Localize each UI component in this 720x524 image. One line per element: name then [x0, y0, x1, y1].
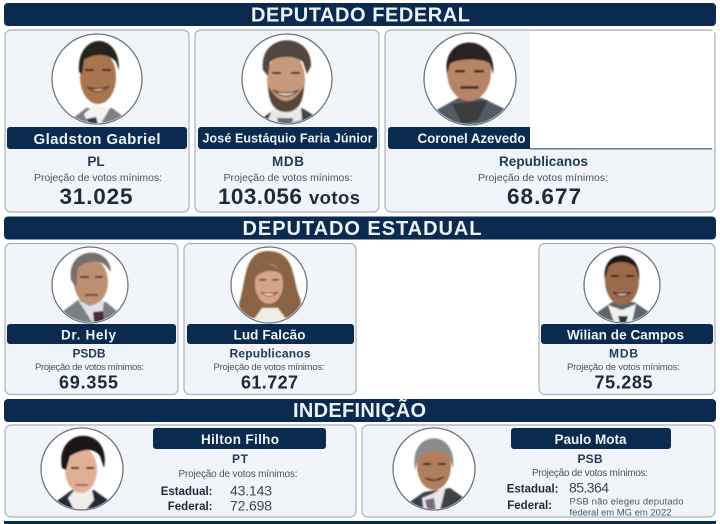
icon: portrait Gladston Gabriel	[52, 34, 142, 130]
icon: portrait Lud Falcão	[231, 247, 307, 323]
label: Projeção de votos mínimos:	[34, 172, 162, 184]
label: Projeção de votos mínimos:	[178, 469, 298, 480]
estadual: Estadual:	[161, 486, 212, 498]
votes: 68.677	[507, 184, 581, 209]
name bar: Wilian de Campos	[567, 328, 684, 342]
votes: 75.285	[594, 372, 652, 392]
panel: Dr. Hely	[5, 244, 178, 394]
federal: federal em MG em 2022	[570, 508, 672, 518]
white cover	[530, 31, 714, 149]
icon: portrait Coronel Azevedo	[424, 33, 516, 130]
party: Republicanos	[499, 154, 588, 169]
name bar: Coronel Azevedo	[418, 131, 526, 146]
party: MDB	[609, 346, 638, 360]
votes: 31.025	[60, 184, 132, 209]
name bar	[388, 127, 714, 149]
federal	[507, 496, 684, 518]
federal: Federal:	[168, 501, 212, 513]
label: Projeção de votos mínimos:	[532, 468, 648, 479]
estadual	[507, 480, 609, 496]
panel: Lud Falcão	[184, 244, 356, 394]
name bar	[511, 428, 671, 449]
icon: portrait José Eustáquio	[242, 34, 332, 130]
icon: portrait Paulo Mota	[393, 428, 475, 512]
party: Republicanos	[230, 346, 311, 360]
estadual	[161, 482, 272, 498]
label: Projeção de votos mínimos:	[567, 362, 680, 373]
icon: portrait Wilian de Campos	[584, 247, 660, 325]
heading: Indefinição	[4, 399, 716, 422]
estadual: Estadual:	[507, 484, 558, 496]
name bar	[187, 324, 354, 344]
panel: Hilton Filho	[5, 425, 356, 517]
icon: portrait Hilton Filho	[41, 428, 123, 512]
label: Projeção de votos mínimos:	[224, 172, 352, 184]
federal: 72.698	[230, 498, 272, 514]
panel: Wilian de Campos	[539, 244, 715, 394]
name bar: Gladston Gabriel	[34, 131, 160, 148]
name bar	[7, 324, 176, 344]
federal: PSB não elegeu deputado	[570, 496, 684, 508]
name bar	[198, 127, 377, 149]
party: PSDB	[72, 346, 106, 360]
party: PSB	[578, 452, 603, 466]
panel: Gladston Gabriel	[5, 30, 189, 212]
name bar: Paulo Mota	[554, 432, 627, 447]
label: Projeção de votos mínimos:	[214, 362, 324, 373]
heading: Deputado Federal	[4, 3, 716, 26]
name bar: Dr. Hely	[61, 328, 116, 342]
heading: Deputado Estadual	[4, 216, 716, 240]
name bar: José Eustáquio Faria Júnior	[202, 132, 373, 146]
party: PL	[87, 154, 105, 169]
federal	[168, 498, 272, 514]
name bar	[541, 324, 713, 344]
estadual: 85.364	[569, 480, 609, 496]
votes: 69.355	[59, 372, 118, 392]
heading: Deputado Estadual: DEPUTADO ESTADUAL	[242, 218, 482, 240]
name bar	[7, 127, 187, 149]
heading: Deputado Federal: DEPUTADO FEDERAL	[251, 4, 470, 26]
label: Projeção de votos mínimos:	[35, 362, 144, 373]
votes: 61.727	[241, 372, 298, 392]
name bar	[153, 428, 326, 449]
estadual: 43.143	[230, 482, 272, 498]
name bar: Lud Falcão	[234, 328, 306, 342]
panel: Coronel Azevedo	[385, 30, 715, 212]
bottom bar	[4, 521, 716, 524]
votes: 103.056 votos	[218, 184, 360, 209]
label: Projeção de votos mínimos:	[478, 172, 608, 184]
party: PT	[232, 452, 249, 466]
icon: portrait Dr. Hely	[52, 247, 128, 325]
heading: Indefinição: INDEFINIÇÃO	[293, 399, 426, 422]
panel: José Eustáquio Faria Júnior	[195, 30, 379, 212]
panel: Paulo Mota	[362, 425, 715, 518]
federal: Federal:	[507, 500, 552, 512]
party: MDB	[272, 154, 304, 169]
name bar: Hilton Filho	[201, 432, 279, 447]
